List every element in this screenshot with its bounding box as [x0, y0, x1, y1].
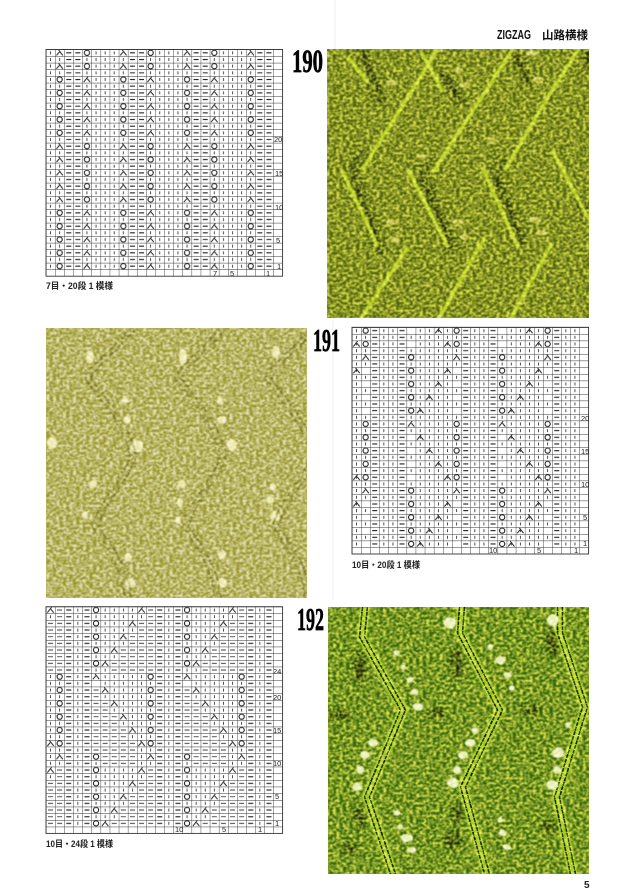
stitch chart 190: 1	[277, 262, 281, 271]
stitch chart 190: 10	[275, 203, 283, 212]
knit swatch 191	[46, 328, 307, 598]
page heading: ZIGZAG	[497, 27, 588, 42]
page heading: ZIGZAG: ZIGZAG	[497, 27, 531, 42]
stitch chart 191: 20	[581, 414, 589, 423]
stitch chart 190: 15	[275, 169, 283, 178]
knit swatch 192	[328, 607, 589, 874]
stitch chart 191: 15	[581, 447, 589, 456]
stitch chart 192: 5	[275, 792, 279, 801]
stitch chart 191: 1	[583, 539, 587, 548]
stitch chart 190	[46, 50, 283, 278]
stitch chart 191: 5	[537, 546, 541, 555]
caption: chart 191 repeat: 10目・20段 1 模様	[352, 559, 420, 570]
stitch chart 192: 24	[273, 667, 281, 676]
pattern number 192: 192	[297, 601, 324, 637]
stitch chart 190: 5	[276, 236, 280, 245]
stitch chart 191: 10	[489, 546, 497, 555]
stitch chart 191: 10	[581, 480, 589, 489]
stitch chart 192	[46, 607, 283, 834]
stitch chart 190: 20	[274, 135, 282, 144]
page heading: ZIGZAG: 山路横様	[542, 28, 588, 42]
stitch chart 190: 7	[213, 269, 217, 278]
stitch chart 192: 10	[175, 825, 183, 834]
stitch chart 192: 15	[273, 726, 281, 735]
pattern number 191: 191	[313, 322, 340, 358]
stitch chart 192: 1	[275, 819, 279, 828]
stitch chart 191: 1	[574, 546, 578, 555]
stitch chart 191: 5	[583, 513, 587, 522]
stitch chart 190: 1	[266, 269, 270, 278]
stitch chart 192: 10	[273, 759, 281, 768]
caption: chart 192 repeat: 10目・24段 1 模様	[46, 838, 113, 849]
stitch chart 191	[352, 327, 589, 555]
stitch chart 190: 5	[230, 269, 234, 278]
caption: chart 190 repeat: 7目・20段 1 模様	[46, 280, 113, 291]
knit swatch 190	[327, 45, 592, 320]
stitch chart 192: 1	[258, 825, 262, 834]
pattern number 190: 190	[292, 44, 323, 80]
stitch chart 192: 20	[273, 693, 281, 702]
stitch chart 192: 5	[222, 825, 226, 834]
